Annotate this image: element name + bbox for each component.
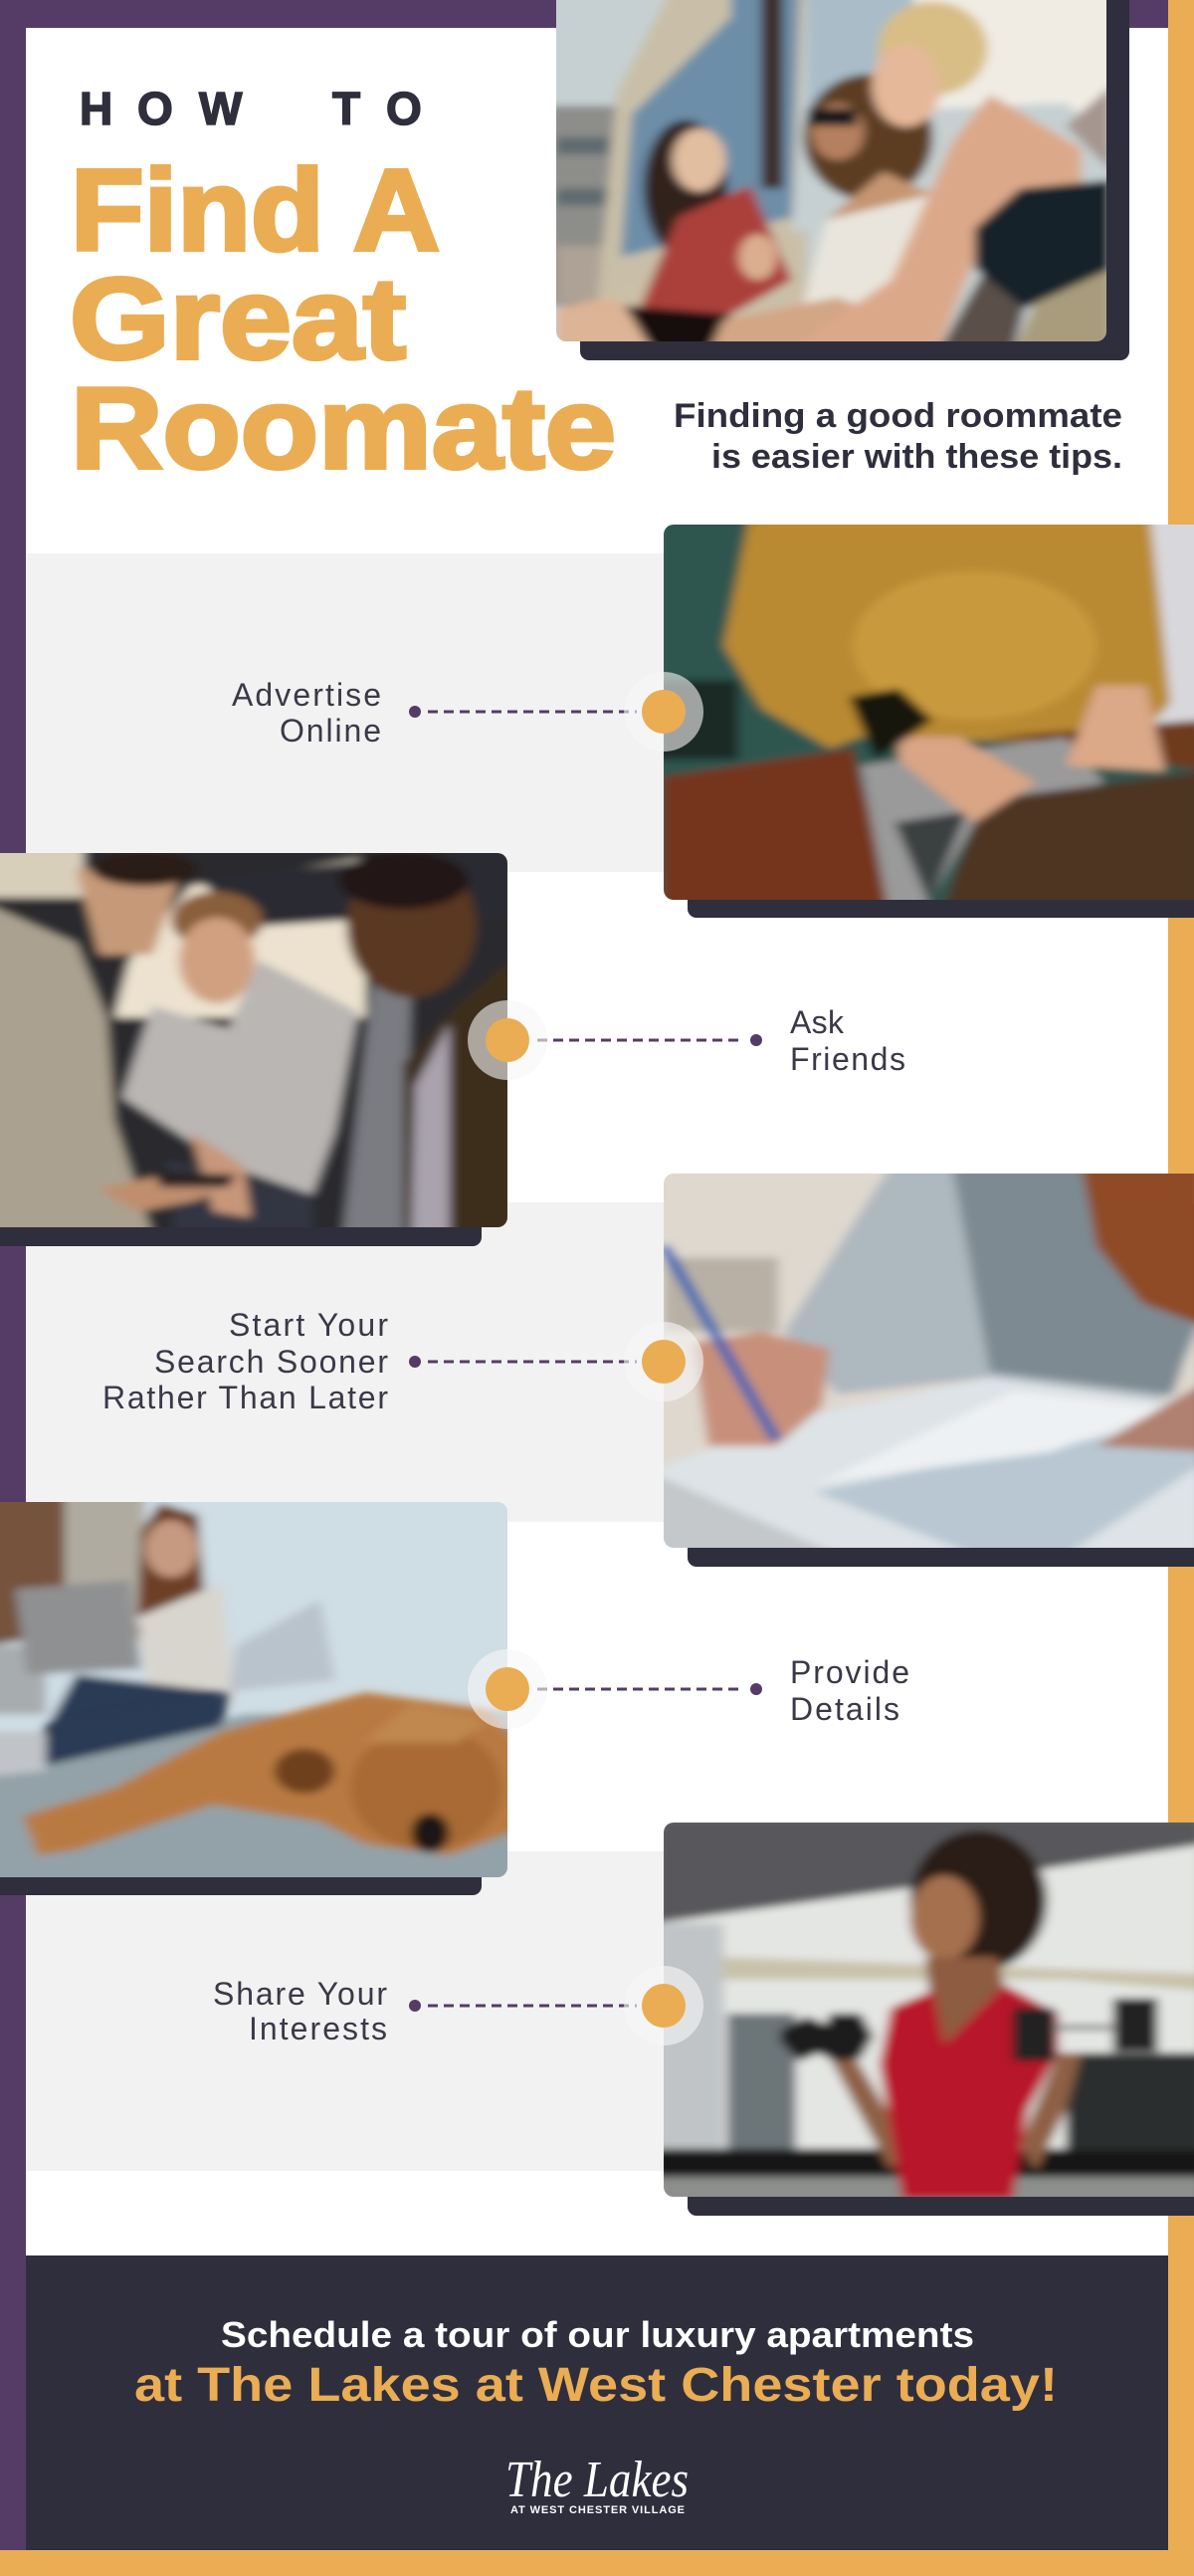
photo shadow: dog bbox=[0, 1533, 482, 1895]
panel: grey band 1 bbox=[26, 553, 683, 872]
step 5: share your interests: Share Your bbox=[213, 1976, 387, 2012]
step 2: ask friends: Ask bbox=[790, 1004, 845, 1040]
photo shadow: laptop bbox=[688, 557, 1194, 918]
panel: grey band 2 bbox=[26, 1202, 683, 1522]
title: find a great roomate: Roomate bbox=[71, 363, 616, 493]
title: how to: HOW TO bbox=[80, 83, 422, 134]
photo: three women laughing bbox=[556, 0, 1106, 341]
title: find a great roomate: Great bbox=[70, 254, 406, 383]
title: find a great roomate: Find A bbox=[71, 145, 440, 275]
step 3: start your search sooner: Search Sooner bbox=[154, 1344, 388, 1380]
photo shadow: friends bbox=[0, 896, 482, 1246]
step 3: start your search sooner bbox=[102, 1307, 703, 1415]
cta heading: Schedule a tour of our luxury apartments bbox=[221, 2314, 974, 2355]
step 4: provide details bbox=[468, 1649, 909, 1729]
panel: call to action banner bbox=[26, 2255, 1168, 2550]
step 2: ask friends bbox=[468, 1000, 905, 1080]
panel: grey band 3 bbox=[26, 1851, 683, 2171]
logo: The Lakes bbox=[505, 2452, 689, 2508]
subtitle: is easier with these tips. bbox=[711, 438, 1122, 476]
photo shadow: header bbox=[580, 0, 1129, 360]
photo: woman writing in notebook bbox=[655, 1166, 1194, 1555]
step 4: provide details: Provide bbox=[790, 1654, 909, 1690]
photo shadow: gym bbox=[688, 1851, 1194, 2216]
step 1: advertise online: Advertise bbox=[232, 677, 381, 713]
cta highlight: at The Lakes at West Chester today! bbox=[134, 2359, 1058, 2412]
subtitle bbox=[674, 397, 1122, 476]
step 3: start your search sooner: Rather Than Later bbox=[102, 1380, 388, 1415]
step 1: advertise online bbox=[232, 672, 703, 751]
step 5: share your interests bbox=[213, 1966, 703, 2046]
step 2: ask friends: Friends bbox=[790, 1041, 905, 1077]
photo: woman lifting dumbbells bbox=[655, 1817, 1194, 2205]
step 5: share your interests: Interests bbox=[249, 2011, 387, 2046]
logo: AT WEST CHESTER VILLAGE bbox=[510, 2504, 685, 2516]
photo shadow: writing bbox=[688, 1204, 1194, 1567]
photo: hands typing on laptop bbox=[664, 525, 1194, 900]
title: find a great roomate bbox=[70, 145, 616, 493]
step 4: provide details: Details bbox=[790, 1691, 899, 1727]
photo: three men looking at a tablet bbox=[0, 840, 517, 1240]
subtitle: Finding a good roommate bbox=[674, 397, 1122, 435]
photo: woman on laptop with sleeping dog bbox=[0, 1502, 507, 1877]
step 1: advertise online: Online bbox=[280, 713, 381, 749]
step 3: start your search sooner: Start Your bbox=[229, 1307, 388, 1343]
